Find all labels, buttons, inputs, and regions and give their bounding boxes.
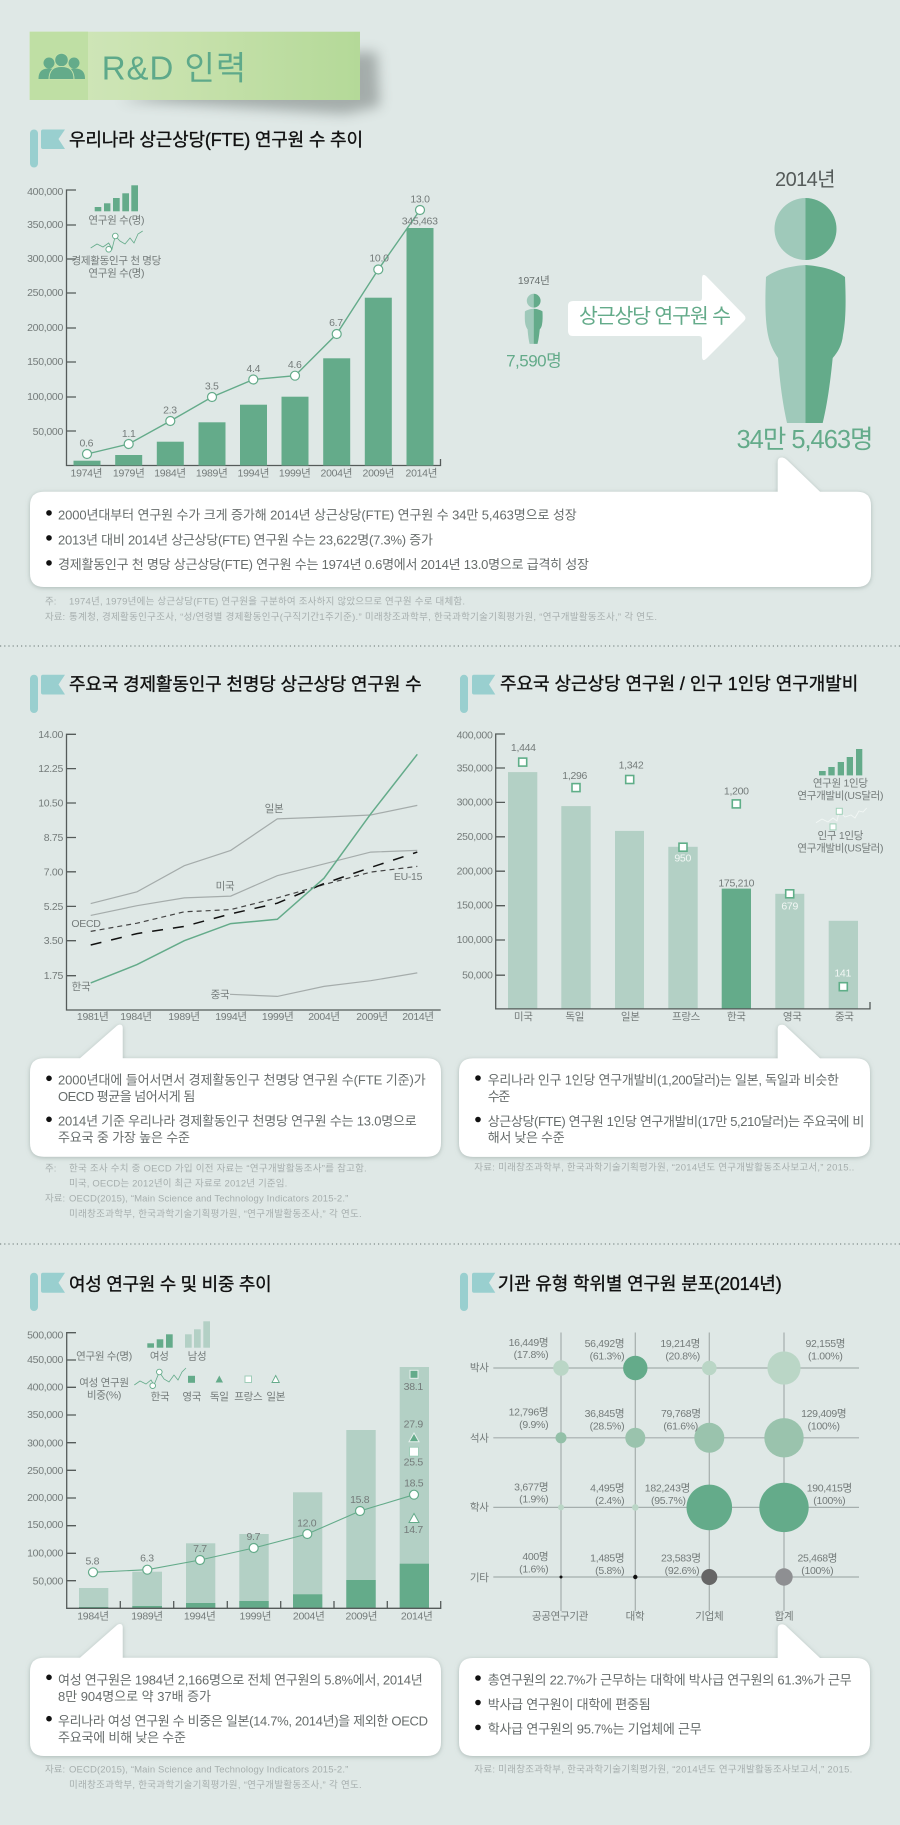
notes: section 2: 미국, OECD는 2012년이 최근 자료로 2012년 기준임. bbox=[69, 1178, 287, 1190]
notes: section 4 bbox=[45, 1764, 362, 1791]
bubble value labels: (9.9%) bbox=[519, 1419, 548, 1431]
row labels bbox=[470, 1362, 489, 1584]
total column labels: (1.00%) bbox=[808, 1351, 843, 1363]
line value labels: 5.8 bbox=[85, 1556, 100, 1568]
y axis labels: 12.25 bbox=[38, 763, 63, 775]
x axis labels: 1974년 bbox=[71, 468, 102, 480]
y axis labels: 400,000 bbox=[457, 730, 493, 742]
notes: section 1: 통계청, 경제활동인구조사, “성/연령별 경제활동인구(구직기간1주기준).” 미래창조과학부, 한국과학기술기획평가원, “연구개발활동조사,” 각 연도. bbox=[69, 611, 657, 623]
legend bbox=[797, 749, 883, 855]
bubble value labels: 79,768명 bbox=[661, 1408, 701, 1420]
callout: researcher growth: 경제활동인구 천 명당 상근상당(FTE) 연구원 수는 1974년 0.6명에서 2014년 13.0명으로 급격히 성장 bbox=[58, 557, 589, 572]
value: 34만 5,463명: 34만 5,463명 bbox=[736, 426, 874, 454]
column labels: 대학 bbox=[626, 1611, 645, 1623]
total column labels: (100%) bbox=[801, 1565, 833, 1577]
total column labels: 92,155명 bbox=[805, 1338, 845, 1350]
value labels: 175,210 bbox=[718, 878, 755, 890]
section heading: 우리나라 상근상당 연구원 수 추이 bbox=[30, 130, 363, 168]
section heading: 주요국 경제활동인구 천명당 연구원 수 bbox=[30, 674, 422, 713]
markers: OECD countries 2014: 27.9 bbox=[404, 1418, 423, 1430]
notes: section 2: 미래창조과학부, 한국과학기술기획평가원, “연구개발활동조사,” 각 연도. bbox=[69, 1208, 362, 1220]
callout: per capita spending: 상근상당(FTE) 연구원 1인당 연구개발비(17만 5,210달러)는 주요국에 비 bbox=[488, 1114, 864, 1129]
notes: section 4: OECD(2015), “Main Science and Technology Indicators 2015-2.” bbox=[69, 1764, 348, 1776]
grid lines bbox=[493, 1332, 859, 1611]
legend: 경제활동인구 천 명당 bbox=[72, 254, 162, 267]
value labels: 10.0 bbox=[369, 252, 389, 264]
y axis labels: 450,000 bbox=[27, 1354, 63, 1366]
line: EU-15 bbox=[91, 866, 417, 931]
legend: 영국 bbox=[182, 1391, 202, 1403]
value labels: 4.4 bbox=[246, 363, 261, 375]
column labels: 합계 bbox=[775, 1611, 793, 1623]
x axis labels: 2014년 bbox=[401, 1611, 432, 1623]
y axis labels: 300,000 bbox=[27, 253, 63, 265]
x axis labels: 1981년 bbox=[77, 1011, 108, 1023]
notes: section 2 bbox=[45, 1162, 367, 1220]
label: 1974: 1974년 bbox=[518, 275, 549, 287]
line value labels: 7.7 bbox=[193, 1543, 207, 1555]
bubble value labels bbox=[509, 1337, 701, 1577]
title banner: R&D 인력: R&D 인력 bbox=[102, 50, 246, 86]
series labels: OECD bbox=[71, 918, 101, 930]
x axis labels: 1984년 bbox=[154, 468, 186, 480]
row labels: 학사 bbox=[470, 1501, 489, 1513]
callout: per capita spending: 수준 bbox=[488, 1089, 510, 1104]
callout: researcher growth: 2013년 대비 2014년 상근상당(FTE) 연구원 수는 23,622명(7.3%) 증가 bbox=[58, 532, 433, 548]
notes: section 4: 자료: bbox=[45, 1764, 65, 1776]
x axis labels: 중국 bbox=[835, 1011, 854, 1023]
icon: three people bbox=[38, 53, 85, 80]
bubble value labels: 23,583명 bbox=[661, 1552, 701, 1564]
y axis labels: 5.25 bbox=[44, 901, 63, 913]
legend: 프랑스 bbox=[234, 1391, 263, 1403]
x axis labels: 한국 bbox=[727, 1011, 746, 1023]
y axis labels: 250,000 bbox=[27, 287, 63, 299]
bubble value labels: 4,495명 bbox=[590, 1483, 624, 1495]
y axis labels: 150,000 bbox=[457, 900, 493, 912]
y axis labels bbox=[27, 186, 63, 438]
legend: 연구원 1인당 bbox=[813, 778, 868, 790]
series labels: 한국 bbox=[72, 981, 91, 993]
stacked bar chart: female researchers bbox=[27, 1321, 441, 1623]
y axis labels: 300,000 bbox=[457, 796, 493, 808]
note: section 5: 자료: 미래창조과학부, 한국과학기술기획평가원, “2014년도 연구개발활동조사보고서,” 2015. bbox=[474, 1764, 852, 1776]
line: 한국 bbox=[91, 754, 417, 983]
x axis labels bbox=[514, 1010, 854, 1023]
x axis labels: 1999년 bbox=[279, 468, 310, 480]
y axis labels: 350,000 bbox=[27, 219, 63, 231]
row labels: 기타 bbox=[470, 1572, 489, 1584]
bubble value labels: 182,243명 bbox=[645, 1483, 690, 1495]
callout: OECD comparison: OECD 평균을 넘어서게 됨 bbox=[58, 1089, 195, 1104]
legend bbox=[72, 185, 162, 280]
value labels bbox=[511, 742, 755, 890]
legend: 인구 1인당 bbox=[817, 830, 864, 842]
column labels bbox=[532, 1610, 793, 1623]
callout: per capita spending: 해서 낮은 수준 bbox=[488, 1130, 565, 1145]
bubble value labels: (20.8%) bbox=[665, 1351, 700, 1363]
bubble value labels: (2.4%) bbox=[595, 1495, 624, 1507]
bubble value labels: 3,677명 bbox=[514, 1481, 548, 1493]
notes: section 2: 자료: bbox=[45, 1194, 65, 1204]
x axis labels bbox=[77, 1611, 432, 1623]
y axis labels: 250,000 bbox=[27, 1465, 63, 1477]
callout: female researchers: 8만 904명으로 약 37배 증가 bbox=[58, 1689, 211, 1704]
notes: section 1: 1974년, 1979년에는 상근상당(FTE) 연구원을 구분하여 조사하지 않았으므로 연구원 수로 대체함. bbox=[69, 596, 465, 608]
x axis labels: 프랑스 bbox=[672, 1011, 701, 1023]
legend bbox=[76, 1321, 286, 1403]
bar chart: R&D spending by country: 141 bbox=[834, 968, 851, 980]
y axis labels: 150,000 bbox=[27, 1519, 63, 1531]
y axis labels: 7.00 bbox=[44, 866, 63, 878]
line value labels: 9.7 bbox=[246, 1531, 261, 1543]
legend: 독일 bbox=[210, 1390, 229, 1403]
person comparison 1974 to 2014 bbox=[506, 168, 874, 454]
y axis labels: 200,000 bbox=[27, 1492, 63, 1504]
total column labels: (100%) bbox=[813, 1495, 845, 1507]
y axis labels: 1.75 bbox=[44, 970, 63, 982]
series labels: 일본 bbox=[265, 802, 284, 815]
value labels: 1,200 bbox=[724, 786, 749, 798]
y axis labels: 300,000 bbox=[27, 1438, 63, 1450]
axes bbox=[67, 1333, 441, 1608]
bars: researchers bbox=[74, 228, 434, 466]
line value labels: 15.8 bbox=[350, 1494, 370, 1506]
legend: 여성 bbox=[150, 1351, 169, 1363]
callout: degree distribution: 학사급 연구원의 95.7%는 기업체에 근무 bbox=[488, 1722, 702, 1736]
line: 한국 share bbox=[88, 1490, 418, 1577]
callout: OECD comparison: 2014년 기준 우리나라 경제활동인구 천명당 연구원 수는 13.0명으로 bbox=[58, 1114, 417, 1128]
section heading: 여성 연구원 수 및 비중 추이 bbox=[30, 1273, 272, 1311]
bubble value labels: 400명 bbox=[522, 1551, 548, 1563]
series labels: 미국 bbox=[216, 880, 235, 892]
value labels: 1.1 bbox=[122, 428, 136, 440]
bubble value labels: 19,214명 bbox=[660, 1338, 700, 1350]
x axis labels: 2014년 bbox=[402, 1011, 434, 1023]
value labels: 0.6 bbox=[79, 437, 94, 449]
label: 2014: 2014년 bbox=[775, 168, 835, 191]
value labels: 2.3 bbox=[163, 405, 177, 417]
section heading: 주요국 상근상당 연구원 / 인구 1인당 연구개발비 bbox=[460, 674, 858, 713]
bars bbox=[508, 772, 858, 1009]
series labels: EU-15 bbox=[394, 871, 423, 883]
callout: per capita spending: 우리나라 인구 1인당 연구개발비(1,200달러)는 일본, 독일과 비슷한 bbox=[488, 1072, 839, 1088]
combo chart: FTE researchers and per-thousand line bbox=[27, 185, 440, 480]
callout: female researchers: 여성 연구원은 1984년 2,166명으로 전체 연구원의 5.8%에서, 2014년 bbox=[58, 1672, 423, 1688]
x axis labels: 2004년 bbox=[321, 468, 352, 480]
y axis labels: 50,000 bbox=[33, 1576, 63, 1588]
section heading: 여성 연구원 수 및 비중 추이: 여성 연구원 수 및 비중 추이 bbox=[69, 1274, 272, 1294]
x axis labels bbox=[71, 468, 437, 480]
callout: OECD comparison: 2000년대에 들어서면서 경제활동인구 천명당 연구원 수(FTE 기준)가 bbox=[58, 1072, 426, 1088]
bubble value labels: (5.8%) bbox=[595, 1565, 624, 1577]
bubble value labels: (95.7%) bbox=[651, 1495, 686, 1507]
section heading: 주요국 상근상당 연구원 / 인구 1인당 연구개발비: 주요국 상근상당 연구원 / 인구 1인당 연구개발비 bbox=[500, 674, 858, 694]
y axis labels bbox=[27, 1330, 63, 1588]
callout: degree distribution: 박사급 연구원이 대학에 편중됨 bbox=[488, 1697, 651, 1712]
callout: per capita spending bbox=[459, 1025, 870, 1157]
y axis with ticks bbox=[66, 190, 440, 466]
notes: section 2: OECD(2015), “Main Science and Technology Indicators 2015-2.” bbox=[69, 1194, 348, 1204]
line: OECD bbox=[91, 852, 417, 945]
legend: 비중(%) bbox=[87, 1390, 121, 1402]
legend: 연구원 수(명) bbox=[76, 1351, 132, 1363]
bar: 한국 highlighted bbox=[722, 889, 751, 1009]
line value labels bbox=[85, 1477, 424, 1568]
value labels: 4.6 bbox=[288, 359, 302, 371]
arrow: 상근상당 연구원 수 bbox=[579, 305, 731, 328]
markers: OECD countries 2014: 14.7 bbox=[404, 1524, 423, 1536]
callout: researcher growth bbox=[30, 457, 871, 587]
x axis labels: 2009년 bbox=[356, 1011, 388, 1023]
total column labels: 129,409명 bbox=[801, 1408, 846, 1420]
x axis labels: 1984년 bbox=[77, 1611, 109, 1623]
y axis labels: 150,000 bbox=[27, 356, 63, 368]
arrow bbox=[568, 275, 746, 360]
bar chart: R&D spending by country: 679 bbox=[781, 900, 798, 912]
x axis labels: 미국 bbox=[514, 1011, 533, 1023]
section heading: 기관 유형 학위별 연구원 분포: 기관 유형 학위별 연구원 분포(2014년) bbox=[498, 1274, 782, 1294]
value labels: 1,342 bbox=[619, 759, 644, 771]
notes: section 1: 자료: bbox=[45, 612, 65, 623]
y axis labels: 10.50 bbox=[38, 798, 63, 810]
total column labels: (100%) bbox=[808, 1420, 840, 1432]
line chart: researchers per thousand by country bbox=[38, 729, 441, 1023]
line: 일본 bbox=[91, 805, 417, 904]
value labels: 6.7 bbox=[329, 317, 343, 329]
notes: section 1: 주: bbox=[45, 596, 56, 608]
callout: researcher growth: 2000년대부터 연구원 수가 크게 증가해 2014년 상근상당(FTE) 연구원 수 34만 5,463명으로 성장 bbox=[58, 508, 577, 522]
line value labels: 6.3 bbox=[140, 1552, 154, 1564]
x axis labels: 1989년 bbox=[196, 468, 227, 480]
legend: 연구원 수(명) bbox=[88, 214, 144, 226]
y axis labels: 100,000 bbox=[27, 1548, 63, 1560]
total column labels: 25,468명 bbox=[797, 1552, 837, 1564]
x axis labels: 1994년 bbox=[184, 1611, 215, 1623]
x axis labels: 1994년 bbox=[215, 1011, 247, 1023]
x axis labels bbox=[77, 1011, 434, 1023]
axes bbox=[66, 734, 441, 1010]
bubble value labels: 16,449명 bbox=[509, 1337, 548, 1349]
section heading: 기관 유형 학위별 연구원 분포 bbox=[460, 1273, 782, 1311]
x axis labels: 1984년 bbox=[120, 1011, 152, 1023]
value: 7,590명: 7,590명 bbox=[506, 352, 561, 370]
callout: degree distribution bbox=[459, 1624, 870, 1756]
icon: small person bbox=[525, 294, 543, 344]
total column labels bbox=[797, 1338, 852, 1577]
bubble value labels: 56,492명 bbox=[585, 1338, 624, 1350]
row labels: 석사 bbox=[470, 1432, 489, 1444]
series labels: 중국 bbox=[211, 989, 230, 1001]
notes: section 4: 미래창조과학부, 한국과학기술기획평가원, “연구개발활동조사,” 각 연도. bbox=[69, 1779, 362, 1791]
legend: 연구개발비(US달러) bbox=[797, 790, 883, 802]
y axis labels bbox=[38, 729, 63, 982]
bubble value labels: (1.9%) bbox=[519, 1494, 548, 1506]
bubble value labels: (17.8%) bbox=[514, 1349, 548, 1361]
notes: section 2: 주: bbox=[45, 1164, 56, 1174]
x axis labels: 2004년 bbox=[293, 1611, 324, 1623]
axes bbox=[496, 734, 870, 1009]
total column labels: 190,415명 bbox=[807, 1483, 852, 1495]
legend: 남성 bbox=[188, 1351, 206, 1363]
y axis labels: 3.50 bbox=[44, 935, 63, 947]
bubble matrix: researchers by institution and degree bbox=[470, 1332, 859, 1623]
column labels: 공공연구기관 bbox=[532, 1611, 589, 1623]
value labels: 345,463 bbox=[402, 216, 438, 228]
line value labels: 12.0 bbox=[297, 1517, 317, 1529]
bubble value labels: 12,796명 bbox=[509, 1406, 548, 1418]
x axis labels: 1989년 bbox=[131, 1611, 163, 1623]
y axis labels: 8.75 bbox=[44, 832, 63, 844]
y axis labels: 50,000 bbox=[462, 970, 493, 982]
y axis labels: 350,000 bbox=[27, 1409, 63, 1421]
markers: OECD countries 2014: 25.5 bbox=[404, 1456, 423, 1468]
callout: OECD comparison bbox=[30, 1025, 441, 1157]
x axis labels: 2009년 bbox=[363, 468, 394, 480]
line: researchers per thousand bbox=[82, 206, 424, 458]
x axis labels: 1989년 bbox=[168, 1011, 200, 1023]
icon: large person bbox=[765, 198, 846, 423]
bubble value labels: 36,845명 bbox=[585, 1408, 624, 1420]
bubble value labels: (92.6%) bbox=[665, 1565, 699, 1577]
row labels: 박사 bbox=[470, 1362, 489, 1374]
callout: female researchers: 주요국에 비해 낮은 수준 bbox=[58, 1730, 186, 1745]
callout: OECD comparison: 주요국 중 가장 높은 수준 bbox=[58, 1130, 190, 1145]
callout: female researchers bbox=[30, 1624, 441, 1756]
y axis labels: 400,000 bbox=[27, 186, 63, 198]
y axis labels: 400,000 bbox=[27, 1381, 63, 1393]
x axis labels: 1999년 bbox=[240, 1611, 271, 1623]
markers: OECD countries 2014: 38.1 bbox=[404, 1381, 423, 1393]
line: 중국 bbox=[230, 973, 417, 996]
x axis labels: 영국 bbox=[783, 1011, 802, 1023]
bars: total bbox=[79, 1367, 429, 1608]
x axis labels: 2009년 bbox=[346, 1611, 377, 1623]
markers: OECD countries 2014 bbox=[404, 1370, 423, 1536]
value labels: 1,444 bbox=[511, 742, 536, 754]
callout: female researchers: 우리나라 여성 연구원 수 비중은 일본(14.7%, 2014년)을 제외한 OECD bbox=[58, 1714, 428, 1728]
x axis labels: 1999년 bbox=[262, 1011, 293, 1023]
section heading: 우리나라 상근상당 연구원 수 추이: 우리나라 상근상당(FTE) 연구원 수 추이 bbox=[69, 130, 363, 150]
x axis labels: 1979년 bbox=[113, 468, 144, 480]
legend: 한국 bbox=[151, 1391, 170, 1403]
bubble value labels: (61.3%) bbox=[590, 1351, 624, 1363]
y axis labels: 500,000 bbox=[27, 1330, 63, 1342]
bubble value labels: (1.6%) bbox=[519, 1563, 548, 1575]
series labels bbox=[71, 802, 423, 1001]
y axis labels bbox=[457, 730, 493, 982]
notes: section 1 bbox=[45, 596, 657, 623]
y axis labels: 50,000 bbox=[33, 426, 63, 438]
legend: 여성 연구원 bbox=[79, 1377, 129, 1389]
y axis labels: 100,000 bbox=[27, 391, 63, 403]
x axis labels: 2014년 bbox=[406, 468, 437, 480]
line value labels: 18.5 bbox=[404, 1477, 424, 1489]
column labels: 기업체 bbox=[695, 1610, 723, 1623]
value labels: 13.0 bbox=[410, 194, 430, 206]
bars: female bbox=[79, 1564, 429, 1608]
bubble value labels: 1,485명 bbox=[590, 1552, 624, 1564]
value labels: 1,296 bbox=[562, 770, 588, 782]
title banner: R&D 인력 bbox=[30, 32, 380, 114]
y axis labels: 100,000 bbox=[457, 934, 493, 946]
bubble value labels: (28.5%) bbox=[590, 1420, 624, 1432]
x axis labels: 1994년 bbox=[238, 468, 269, 480]
value labels: 3.5 bbox=[205, 381, 219, 393]
y axis labels: 200,000 bbox=[27, 322, 63, 334]
line: 미국 bbox=[91, 850, 417, 915]
markers: per capita spending bbox=[519, 758, 847, 991]
note: section 3: 자료: 미래창조과학부, 한국과학기술기획평가원, “2014년도 연구개발활동조사보고서,” 2015.. bbox=[474, 1162, 854, 1174]
notes: section 2: 한국 조사 수치 중 OECD 가입 이전 자료는 “연구개발활동조사”를 참고함. bbox=[69, 1162, 367, 1174]
x axis labels: 2004년 bbox=[308, 1011, 340, 1023]
y axis labels: 350,000 bbox=[457, 762, 493, 774]
y axis labels: 250,000 bbox=[457, 831, 493, 843]
callout: degree distribution: 총연구원의 22.7%가 근무하는 대학에 박사급 연구원의 61.3%가 근무 bbox=[488, 1672, 852, 1687]
bubble value labels: (61.6%) bbox=[663, 1420, 698, 1432]
y axis labels: 14.00 bbox=[38, 729, 63, 741]
x axis labels: 독일 bbox=[565, 1010, 584, 1023]
bar chart: R&D spending by country bbox=[457, 730, 883, 1023]
value labels bbox=[79, 194, 438, 449]
bar chart: R&D spending by country: 950 bbox=[674, 852, 691, 864]
x axis labels: 일본 bbox=[621, 1010, 640, 1023]
y axis labels: 200,000 bbox=[457, 866, 493, 878]
section heading: 주요국 경제활동인구 천명당 연구원 수: 주요국 경제활동인구 천명당 상근상당 연구원 수 bbox=[69, 674, 422, 694]
bubbles bbox=[553, 1351, 809, 1586]
legend: 연구원 수(명) bbox=[88, 268, 144, 280]
legend: 일본 bbox=[266, 1390, 286, 1403]
legend: 연구개발비(US달러) bbox=[797, 843, 883, 855]
